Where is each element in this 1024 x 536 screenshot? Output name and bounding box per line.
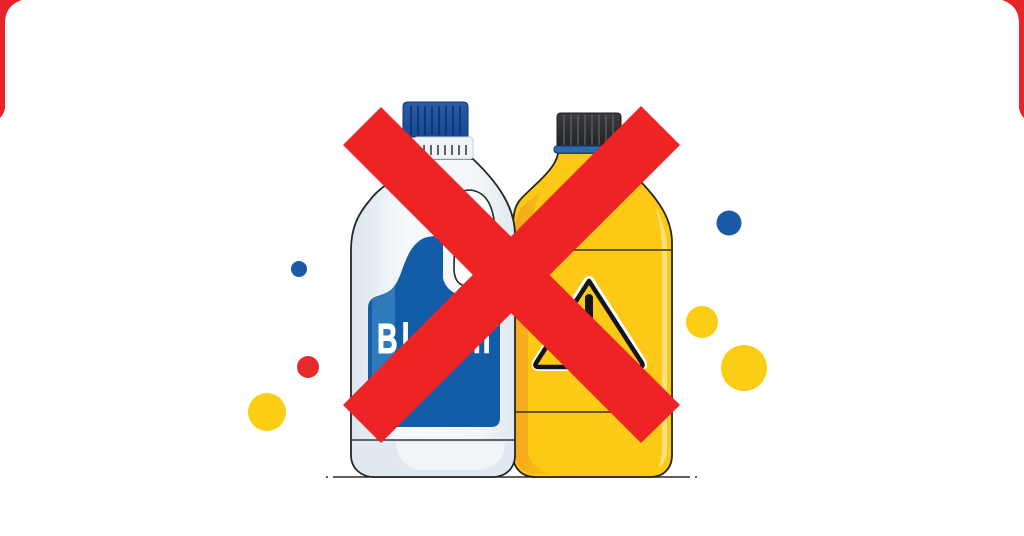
black cap — [557, 113, 621, 146]
right highlight — [655, 205, 667, 467]
decorative dots — [248, 210, 767, 431]
blue ring — [554, 146, 622, 153]
blue label — [368, 236, 500, 427]
warning triangle — [532, 276, 647, 371]
white bleach bottle — [351, 102, 515, 477]
bottle body — [513, 153, 672, 477]
cap ridges — [411, 106, 460, 135]
label text: Bleach — [377, 314, 494, 362]
bottle collar — [414, 137, 473, 159]
bottle body — [351, 159, 515, 477]
bottom band — [352, 440, 514, 476]
red cross-out X — [343, 106, 680, 443]
collar ticks — [424, 145, 466, 155]
bottle seam lines — [514, 250, 671, 412]
left body shade — [515, 192, 552, 474]
cap ridges — [564, 115, 613, 145]
ground line — [326, 476, 697, 478]
bottom highlight — [396, 442, 505, 470]
blue cap — [403, 102, 468, 137]
red corner frame: left — [0, 0, 22, 118]
yellow chemical bottle — [513, 113, 672, 477]
label highlight — [372, 285, 395, 427]
red corner frame: right — [1002, 0, 1024, 118]
handle hole — [454, 190, 494, 286]
